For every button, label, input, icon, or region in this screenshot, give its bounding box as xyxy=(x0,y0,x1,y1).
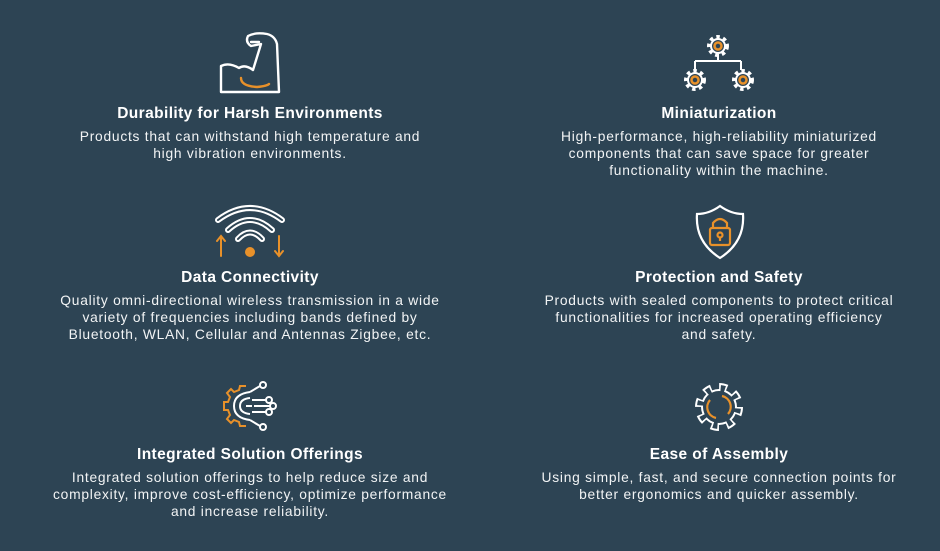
text: miniaturization: functionality within the machine. xyxy=(609,163,829,178)
block: durability xyxy=(80,105,420,161)
icon: wifi xyxy=(215,204,285,258)
block: ease of assembly xyxy=(542,446,896,502)
text: miniaturization xyxy=(561,129,877,178)
text: protection: functionalities for increased operating efficiency xyxy=(555,310,883,325)
text: durability: Products that can withstand high temperature and xyxy=(80,129,420,144)
text: connectivity xyxy=(60,293,440,342)
block: integrated xyxy=(53,446,447,519)
icon: flexed arm xyxy=(220,32,280,94)
heading: integrated: Integrated Solution Offerings xyxy=(137,446,363,463)
text: miniaturization: components that can save space for greater xyxy=(569,146,869,161)
text: durability xyxy=(80,129,420,161)
text: assembly xyxy=(542,470,896,502)
block: data connectivity xyxy=(60,269,440,342)
block: miniaturization xyxy=(561,105,877,178)
text: connectivity: Quality omni-directional wireless transmission in a wide xyxy=(60,293,440,308)
text: connectivity: variety of frequencies including bands defined by xyxy=(82,310,418,325)
text: integrated: complexity, improve cost-efficiency, optimize performance xyxy=(53,487,447,502)
text: protection xyxy=(545,293,893,342)
text: durability: high vibration environments. xyxy=(153,146,347,161)
heading: durability: Durability for Harsh Environments xyxy=(117,105,383,122)
text: integrated: and increase reliability. xyxy=(171,504,329,519)
text: protection: Products with sealed components to protect critical xyxy=(545,293,893,308)
text: assembly: better ergonomics and quicker assembly. xyxy=(579,487,859,502)
text: integrated xyxy=(53,470,447,519)
icon: gear assembly xyxy=(695,383,743,431)
heading: protection: Protection and Safety xyxy=(635,269,803,286)
icon: gears hierarchy xyxy=(684,35,754,91)
text: assembly: Using simple, fast, and secure connection points for xyxy=(542,470,896,485)
text: integrated: Integrated solution offerings to help reduce size and xyxy=(72,470,428,485)
text: protection: and safety. xyxy=(682,327,756,342)
heading: miniaturization: Miniaturization xyxy=(661,105,777,122)
heading: assembly: Ease of Assembly xyxy=(650,446,788,463)
icon: integrated gear circuit xyxy=(223,381,277,431)
block: protection xyxy=(545,269,893,342)
heading: connectivity: Data Connectivity xyxy=(181,269,319,286)
text: connectivity: Bluetooth, WLAN, Cellular and Antennas Zigbee, etc. xyxy=(69,327,431,342)
icon: shield lock xyxy=(696,204,744,260)
text: miniaturization: High-performance, high-reliability miniaturized xyxy=(561,129,877,144)
